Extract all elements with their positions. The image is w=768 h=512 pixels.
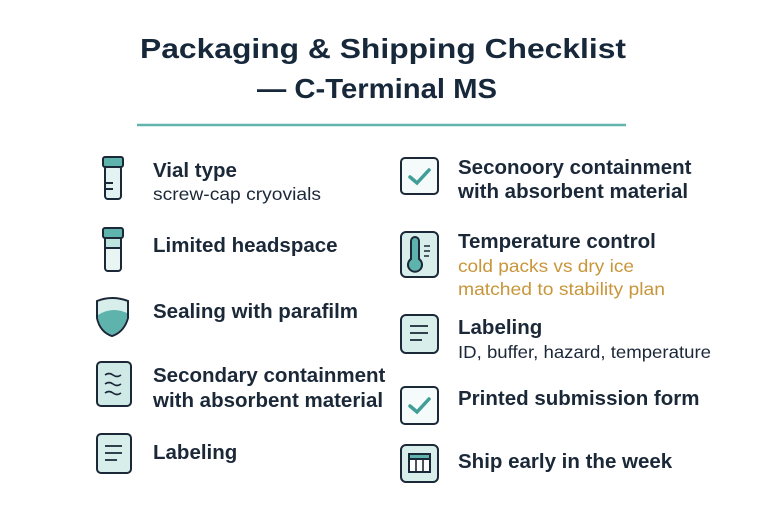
item: temperature control: matched to stability plan	[458, 279, 665, 299]
item: labeling left: Labeling	[153, 441, 237, 464]
item: secondary containment right	[401, 156, 692, 203]
icon: thermometer	[401, 232, 438, 277]
item: labeling left	[97, 434, 237, 473]
item: labeling right: ID, buffer, hazard, temperature	[458, 342, 711, 362]
icon: label	[97, 434, 131, 473]
item: sealing: Sealing with parafilm	[153, 300, 358, 323]
icon: vial	[103, 157, 123, 199]
icon: checkbox	[401, 387, 438, 424]
item: temperature control: Temperature control	[458, 230, 656, 253]
item: secondary containment left: Secondary containment	[153, 364, 386, 387]
icon: calendar	[401, 445, 438, 482]
item: limited headspace: Limited headspace	[153, 234, 338, 257]
item: printed form: Printed submission form	[458, 387, 699, 410]
title: Packaging & Shipping Checklist	[140, 33, 626, 64]
item: secondary containment right: with absorbent material	[457, 180, 688, 203]
icon: absorbent pad	[97, 362, 131, 406]
item: vial type	[103, 157, 321, 204]
icon: vial filled	[103, 228, 123, 271]
item: labeling right	[401, 315, 711, 362]
item: vial type: screw-cap cryovials	[153, 184, 321, 204]
item: labeling right: Labeling	[458, 316, 542, 339]
title	[140, 33, 626, 104]
title: — C-Terminal MS	[257, 73, 497, 104]
item: vial type: Vial type	[153, 159, 237, 182]
item: secondary containment left	[97, 362, 386, 412]
item: temperature control: cold packs vs dry ice	[458, 256, 634, 276]
item: limited headspace	[103, 228, 338, 271]
icon: label	[401, 315, 438, 353]
item: printed form	[401, 387, 699, 424]
item: ship early	[401, 445, 673, 482]
item: secondary containment left: with absorbent material	[152, 389, 383, 412]
item: sealing	[97, 298, 358, 336]
icon: checkbox	[401, 158, 438, 194]
item: temperature control	[401, 230, 665, 299]
item: ship early: Ship early in the week	[458, 450, 673, 473]
item: secondary containment right: Seconoory containment	[458, 156, 692, 179]
icon: shield	[97, 298, 128, 336]
